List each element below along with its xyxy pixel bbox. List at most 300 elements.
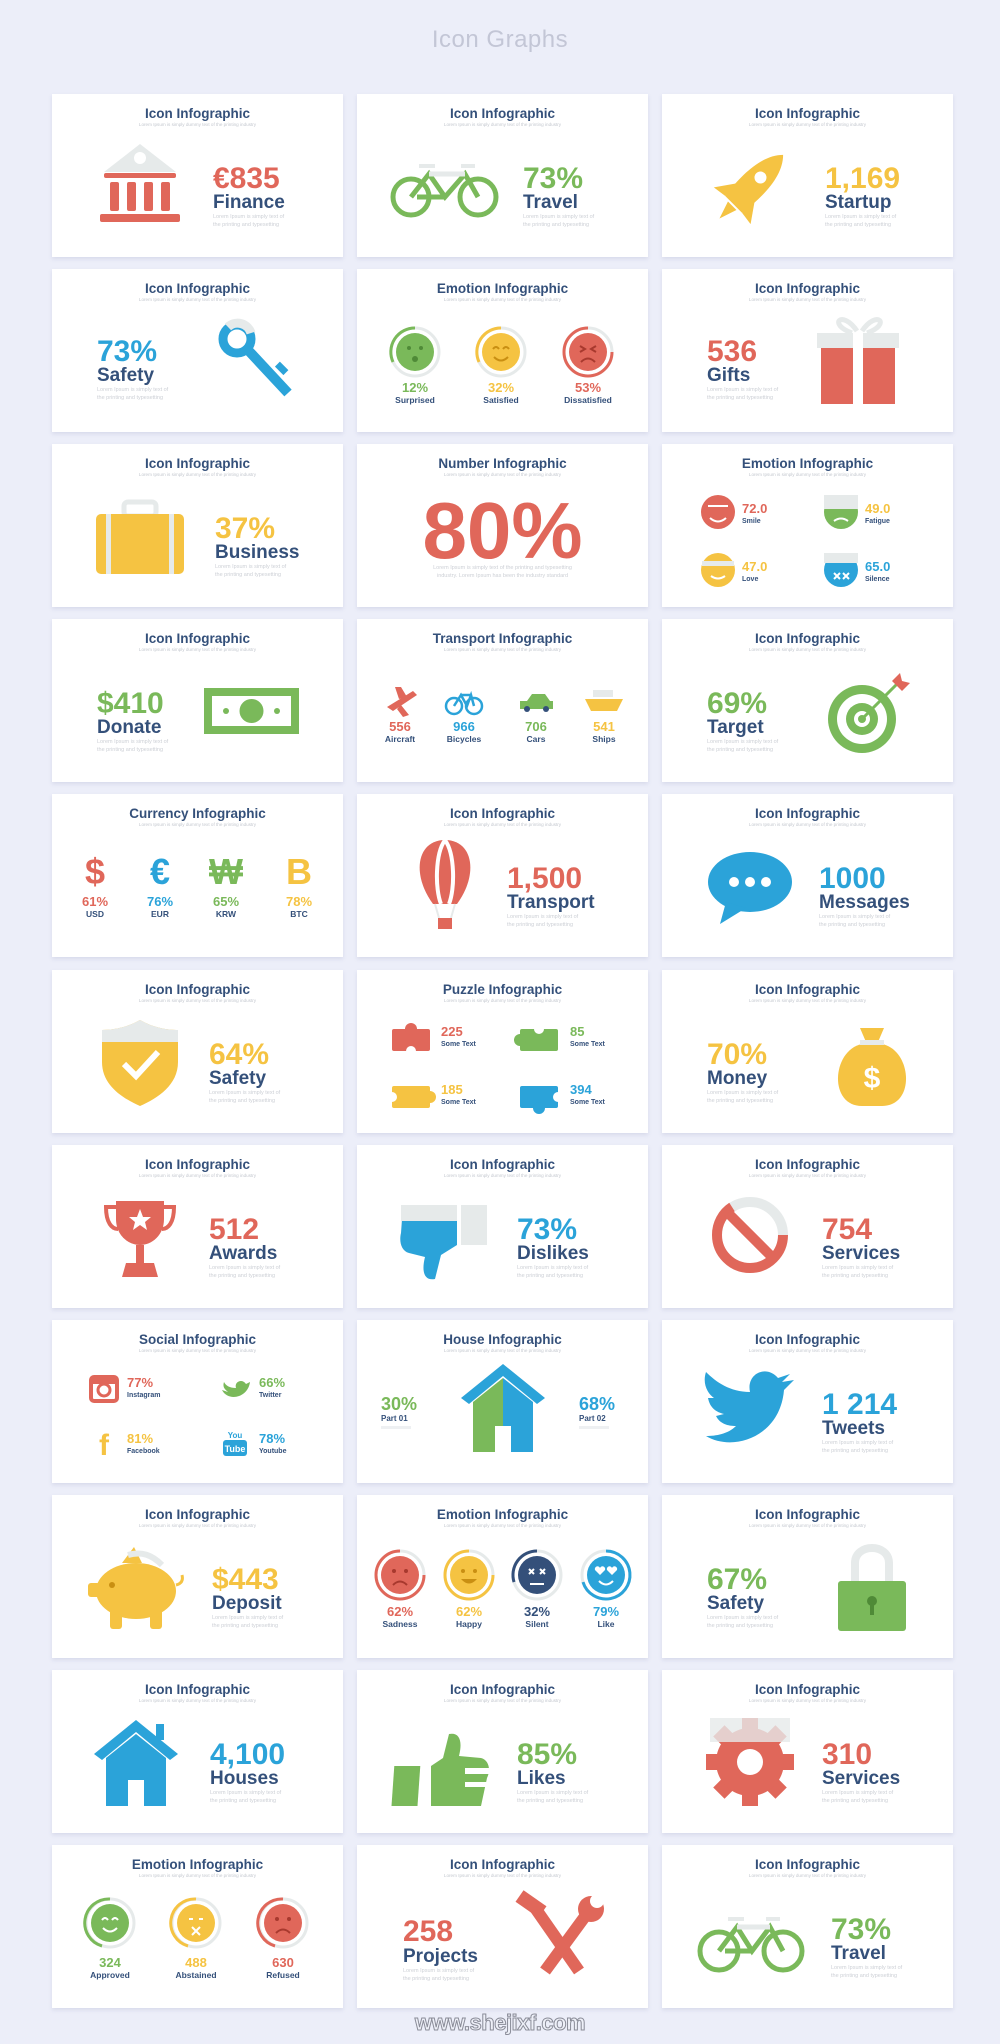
panel: money [662, 970, 953, 1133]
panel: lock safety: Lorem Ipsum is simply text of [707, 1615, 779, 1621]
panel: finance: Lorem Ipsum is simply text of [213, 214, 285, 220]
panel: messages: 1000 [819, 862, 886, 895]
panel: currency: Currency Infographic [129, 806, 266, 821]
face: approved [85, 1899, 134, 1980]
panel: donate: Lorem Ipsum is simply text of [97, 739, 169, 745]
face: dissatisfied: Dissatisfied [564, 395, 612, 405]
panel: donate: $410 [97, 687, 164, 720]
panel: projects: 258 [403, 1915, 453, 1948]
icon: speech bubble [708, 852, 792, 924]
panel: services gear: Lorem Ipsum is simply dummy text of the printing industry [749, 1698, 867, 1703]
panel: shield safety: Safety [209, 1068, 266, 1089]
face: surprised: Surprised [395, 395, 435, 405]
panel: projects: Icon Infographic [450, 1857, 555, 1872]
puzzle: 225 [392, 1023, 477, 1056]
panel: balloon transport [357, 794, 648, 957]
icon: no sign [717, 1202, 783, 1268]
panel: lock safety [662, 1495, 953, 1658]
panel: lock safety: the printing and typesetting [707, 1623, 773, 1629]
panel: number 80%: Lorem Ipsum is simply text of the printing and typesetting [433, 565, 572, 571]
panel: houses: the printing and typesetting [210, 1798, 276, 1804]
panel: likes: Likes [517, 1768, 566, 1789]
panel: services no sign: Icon Infographic [755, 1157, 860, 1172]
panel: awards: Lorem Ipsum is simply dummy text of the printing industry [139, 1173, 257, 1178]
panel: services no sign: the printing and typesetting [822, 1273, 888, 1279]
face: smile: 72.0 [742, 501, 767, 516]
panel: houses: Lorem Ipsum is simply text of [210, 1790, 282, 1796]
icon: bicycle [700, 1917, 802, 1970]
panel: emotion 3 [357, 269, 648, 432]
icon: usd: 61% [82, 894, 108, 909]
panel: safety key: 73% [97, 335, 157, 368]
panel: dislikes [357, 1145, 648, 1308]
face: surprised: 12% [402, 380, 428, 395]
icon: youtube [223, 1431, 287, 1456]
panel: social: Lorem Ipsum is simply dummy text of the printing industry [139, 1348, 257, 1353]
face: abstained: 488 [185, 1955, 207, 1970]
panel: messages: the printing and typesetting [819, 922, 885, 928]
panel: startup [662, 94, 953, 257]
icon: bicycle small: 966 [453, 719, 475, 734]
panel: travel: Travel [523, 192, 578, 213]
icon: twitter [222, 1375, 285, 1399]
panel: money: the printing and typesetting [707, 1098, 773, 1104]
icon: youtube: Youtube [259, 1448, 287, 1455]
panel: travel bike: 73% [831, 1913, 891, 1946]
icon: twitter: 66% [259, 1375, 285, 1390]
face: fatigue: Fatigue [865, 518, 890, 525]
panel: emotion 2x2 [662, 444, 953, 607]
panel: houses: Houses [210, 1768, 279, 1789]
panel: donate: Lorem Ipsum is simply dummy text of the printing industry [139, 647, 257, 652]
icon: eur [147, 851, 173, 919]
puzzle: 225: Some Text [441, 1041, 477, 1048]
face: dissatisfied [564, 328, 612, 405]
panel: services no sign: Lorem Ipsum is simply text of [822, 1265, 894, 1271]
panel: business: Business [215, 542, 299, 563]
panel: messages: Icon Infographic [755, 806, 860, 821]
icon: money bag: $ [864, 1062, 881, 1095]
panel: dislikes: Icon Infographic [450, 1157, 555, 1172]
panel: startup: Icon Infographic [755, 106, 860, 121]
panel: startup: the printing and typesetting [825, 222, 891, 228]
panel: projects: Lorem Ipsum is simply text of [403, 1968, 475, 1974]
face: sadness: 62% [387, 1604, 413, 1619]
panel: gifts: the printing and typesetting [707, 395, 773, 401]
panel: puzzle [357, 970, 648, 1133]
face: smile: Smile [742, 518, 761, 525]
panel: emotion approved [52, 1845, 343, 2008]
panel: house parts: 30% [381, 1394, 417, 1414]
panel: puzzle: Lorem Ipsum is simply dummy text of the printing industry [444, 998, 562, 1003]
panel: messages: Lorem Ipsum is simply dummy text of the printing industry [749, 822, 867, 827]
panel: travel: the printing and typesetting [523, 222, 589, 228]
panel: deposit: Deposit [212, 1593, 282, 1614]
icon: usd: USD [86, 909, 104, 919]
panel: dislikes: 73% [517, 1213, 577, 1246]
icon: youtube: You [228, 1431, 242, 1440]
panel: lock safety: Safety [707, 1593, 764, 1614]
panel: awards: 512 [209, 1213, 259, 1246]
icon: money [204, 688, 299, 734]
panel: awards: Icon Infographic [145, 1157, 250, 1172]
face: silent: 32% [524, 1604, 550, 1619]
panel: shield safety: Icon Infographic [145, 982, 250, 997]
panel: travel bike: Icon Infographic [755, 1857, 860, 1872]
panel: money: Icon Infographic [755, 982, 860, 997]
panel: target: Icon Infographic [755, 631, 860, 646]
icon: krw: 65% [213, 894, 239, 909]
panel: donate: Icon Infographic [145, 631, 250, 646]
panel: messages [662, 794, 953, 957]
panel: houses [52, 1670, 343, 1833]
icon: bicycle small: Bicycles [447, 734, 482, 744]
icon: krw: ₩ [209, 851, 243, 892]
puzzle: 225: 225 [441, 1024, 463, 1039]
icon: trophy [106, 1201, 174, 1277]
icon: house [461, 1364, 545, 1452]
panel: shield safety: 64% [209, 1038, 269, 1071]
panel: lock safety: Lorem Ipsum is simply dummy text of the printing industry [749, 1523, 867, 1528]
icon: facebook [99, 1429, 160, 1462]
panel: donate: Donate [97, 717, 161, 738]
panel: target [662, 619, 953, 782]
panel: messages: Messages [819, 892, 910, 913]
panel: business: 37% [215, 512, 275, 545]
panel: awards: Lorem Ipsum is simply text of [209, 1265, 281, 1271]
puzzle: 185 [387, 1082, 477, 1108]
panel: startup: Lorem Ipsum is simply dummy text of the printing industry [749, 122, 867, 127]
panel: emotion approved: Lorem Ipsum is simply dummy text of the printing industry [139, 1873, 257, 1878]
icon: rocket [701, 137, 801, 237]
icon: ship: Ships [592, 734, 616, 744]
panel: deposit: the printing and typesetting [212, 1623, 278, 1629]
panel: awards [52, 1145, 343, 1308]
panel: target: Lorem Ipsum is simply text of [707, 739, 779, 745]
panel: safety key: Icon Infographic [145, 281, 250, 296]
panel: currency: Lorem Ipsum is simply dummy text of the printing industry [139, 822, 257, 827]
icon: facebook: f [99, 1429, 110, 1462]
panel: emotion 4: Emotion Infographic [437, 1507, 569, 1522]
icon: aircraft [385, 687, 417, 744]
panel: deposit: Lorem Ipsum is simply dummy text of the printing industry [139, 1523, 257, 1528]
panel: travel bike [662, 1845, 953, 2008]
panel: deposit [52, 1495, 343, 1658]
icon: thumbs down [400, 1205, 487, 1279]
icon: facebook: 81% [127, 1431, 153, 1446]
icon: instagram: Instagram [127, 1392, 160, 1399]
panel: number 80%: Lorem Ipsum is simply dummy text of the printing industry [444, 472, 562, 477]
panel: gifts: Gifts [707, 365, 750, 386]
panel: travel bike: Travel [831, 1943, 886, 1964]
icon: ship [585, 690, 623, 744]
panel: finance: €835 [213, 162, 280, 195]
panel: tweets: Tweets [822, 1418, 885, 1439]
panel: dislikes: Dislikes [517, 1243, 589, 1264]
panel: puzzle: Puzzle Infographic [443, 982, 563, 997]
panel: money: Money [707, 1068, 768, 1089]
icon: youtube: Tube [225, 1444, 245, 1454]
panel: money: Lorem Ipsum is simply dummy text of the printing industry [749, 998, 867, 1003]
panel: emotion 3: Lorem Ipsum is simply dummy text of the printing industry [444, 297, 562, 302]
face: silent [513, 1551, 561, 1629]
panel: travel bike: Lorem Ipsum is simply text of [831, 1965, 903, 1971]
panel: social [52, 1320, 343, 1483]
panel: deposit: $443 [212, 1563, 279, 1596]
panel: number 80% [357, 444, 648, 607]
icon: twitter bird [705, 1371, 794, 1442]
panel: likes: the printing and typesetting [517, 1798, 583, 1804]
puzzle: 185: 185 [441, 1082, 463, 1097]
panel: services gear [662, 1670, 953, 1833]
panel: services gear: 310 [822, 1738, 872, 1771]
puzzle: 394: 394 [570, 1082, 592, 1097]
icon: bank [100, 144, 180, 222]
face: fatigue [824, 495, 890, 529]
panel: travel: Icon Infographic [450, 106, 555, 121]
icon: gear [706, 1718, 794, 1806]
panel: tweets: the printing and typesetting [822, 1448, 888, 1454]
panel: houses: 4,100 [210, 1738, 285, 1771]
icon: bicycle small [446, 695, 482, 744]
panel: money: 70% [707, 1038, 767, 1071]
puzzle: 394: Some Text [570, 1099, 606, 1106]
panel: balloon transport: Transport [507, 892, 595, 913]
panel: gifts: Icon Infographic [755, 281, 860, 296]
panel: business: Icon Infographic [145, 456, 250, 471]
face: love [701, 553, 767, 587]
icon: btc: BTC [290, 909, 308, 919]
face: satisfied: Satisfied [483, 395, 519, 405]
icon: usd: $ [85, 851, 105, 892]
panel: dislikes: the printing and typesetting [517, 1273, 583, 1279]
panel: finance: Icon Infographic [145, 106, 250, 121]
panel: emotion 3: Emotion Infographic [437, 281, 569, 296]
face: love: Love [742, 576, 758, 583]
panel: tweets: Icon Infographic [755, 1332, 860, 1347]
panel: deposit: Icon Infographic [145, 1507, 250, 1522]
panel: emotion 2x2: Lorem Ipsum is simply dummy text of the printing industry [749, 472, 867, 477]
face: approved: Approved [90, 1970, 130, 1980]
panel: dislikes: Lorem Ipsum is simply dummy text of the printing industry [444, 1173, 562, 1178]
face: happy: 62% [456, 1604, 482, 1619]
panel: travel [357, 94, 648, 257]
panel: lock safety: 67% [707, 1563, 767, 1596]
panel: lock safety: Icon Infographic [755, 1507, 860, 1522]
panel: shield safety: Lorem Ipsum is simply dummy text of the printing industry [139, 998, 257, 1003]
panel: messages: Lorem Ipsum is simply text of [819, 914, 891, 920]
panel: donate [52, 619, 343, 782]
puzzle: 185: Some Text [441, 1099, 477, 1106]
face: fatigue: 49.0 [865, 501, 890, 516]
panel: transport [357, 619, 648, 782]
icon: shield [102, 1020, 178, 1106]
puzzle: 85: Some Text [570, 1041, 606, 1048]
panel: travel: Lorem Ipsum is simply dummy text of the printing industry [444, 122, 562, 127]
panel: transport: Transport Infographic [433, 631, 573, 646]
panel: dislikes: Lorem Ipsum is simply text of [517, 1265, 589, 1271]
panel: target: 69% [707, 687, 767, 720]
puzzle: 85 [514, 1024, 606, 1051]
panel: houses: Lorem Ipsum is simply dummy text of the printing industry [139, 1698, 257, 1703]
panel: target: Target [707, 717, 764, 738]
panel: transport: Lorem Ipsum is simply dummy text of the printing industry [444, 647, 562, 652]
panel: balloon transport: Lorem Ipsum is simply dummy text of the printing industry [444, 822, 562, 827]
panel: emotion 2x2: Emotion Infographic [742, 456, 874, 471]
icon: lock [838, 1548, 906, 1631]
icon: btc: B [286, 851, 312, 892]
panel: safety key: Lorem Ipsum is simply dummy text of the printing industry [139, 297, 257, 302]
panel: tweets: 1 214 [822, 1388, 897, 1421]
face: silent: Silent [525, 1619, 549, 1629]
panel: projects: the printing and typesetting [403, 1976, 469, 1982]
panel: likes [357, 1670, 648, 1833]
panel: business [52, 444, 343, 607]
face: surprised [391, 328, 439, 405]
panel: balloon transport: 1,500 [507, 862, 582, 895]
panel: services no sign: Services [822, 1243, 900, 1264]
face: satisfied [477, 328, 525, 405]
icon: tools [516, 1890, 604, 1971]
panel: target: Lorem Ipsum is simply dummy text of the printing industry [749, 647, 867, 652]
icon: piggy bank [88, 1547, 182, 1629]
panel: houses: Icon Infographic [145, 1682, 250, 1697]
panel: likes: Lorem Ipsum is simply dummy text of the printing industry [444, 1698, 562, 1703]
face: abstained: Abstained [175, 1970, 217, 1980]
icon: house blue [94, 1720, 178, 1806]
face: refused [258, 1899, 307, 1980]
icon: key [223, 323, 288, 393]
panel: emotion approved: Emotion Infographic [132, 1857, 264, 1872]
icon: briefcase [96, 502, 184, 574]
icon: thumbs up [391, 1734, 489, 1806]
panel: gifts [662, 269, 953, 432]
face: like: 79% [593, 1604, 619, 1619]
face: sadness: Sadness [383, 1619, 418, 1629]
panel: startup: Lorem Ipsum is simply text of [825, 214, 897, 220]
icon: eur: 76% [147, 894, 173, 909]
panel: deposit: Lorem Ipsum is simply text of [212, 1615, 284, 1621]
panel: services gear: Icon Infographic [755, 1682, 860, 1697]
panel: services no sign: Lorem Ipsum is simply dummy text of the printing industry [749, 1173, 867, 1178]
icon: eur: € [150, 851, 170, 892]
face: dissatisfied: 53% [575, 380, 601, 395]
icon: gift [817, 320, 899, 404]
panel: social: Social Infographic [139, 1332, 256, 1347]
icon: btc: 78% [286, 894, 312, 909]
panel: services gear: Services [822, 1768, 900, 1789]
panel: projects: Lorem Ipsum is simply dummy text of the printing industry [444, 1873, 562, 1878]
icon: youtube: 78% [259, 1431, 285, 1446]
icon: instagram: 77% [127, 1375, 153, 1390]
panel: business: the printing and typesetting [215, 572, 281, 578]
puzzle: 394 [520, 1082, 606, 1114]
panel: shield safety [52, 970, 343, 1133]
panel: target: the printing and typesetting [707, 747, 773, 753]
panel: shield safety: the printing and typesetting [209, 1098, 275, 1104]
panel: emotion 4 [357, 1495, 648, 1658]
panel: house parts: 68% [579, 1394, 615, 1414]
panel: business: Lorem Ipsum is simply text of [215, 564, 287, 570]
panel: services gear: Lorem Ipsum is simply text of [822, 1790, 894, 1796]
panel: tweets: Lorem Ipsum is simply text of [822, 1440, 894, 1446]
title: Icon Graphs [432, 26, 568, 53]
icon: balloon [420, 840, 470, 929]
icon: eur: EUR [151, 909, 169, 919]
panel: finance [52, 94, 343, 257]
face: refused: Refused [266, 1970, 300, 1980]
puzzle: 85: 85 [570, 1024, 584, 1039]
panel: projects [357, 1845, 648, 2008]
watermark: www.shejixf.com [415, 2010, 585, 2035]
panel: travel: Lorem Ipsum is simply text of [523, 214, 595, 220]
panel: services no sign: 754 [822, 1213, 872, 1246]
icon: car [520, 694, 553, 744]
face: love: 47.0 [742, 559, 767, 574]
panel: number 80%: industry. Lorem Ipsum has been the industry standard [437, 573, 568, 579]
face: satisfied: 32% [488, 380, 514, 395]
panel: house parts: House Infographic [443, 1332, 562, 1347]
panel: likes: Lorem Ipsum is simply text of [517, 1790, 589, 1796]
panel: likes: Icon Infographic [450, 1682, 555, 1697]
face: like [582, 1551, 630, 1629]
icon: car: 706 [525, 719, 547, 734]
panel: projects: Projects [403, 1946, 478, 1967]
icon: ship: 541 [593, 719, 615, 734]
icon: facebook: Facebook [127, 1448, 160, 1455]
panel: awards: the printing and typesetting [209, 1273, 275, 1279]
panel: gifts: 536 [707, 335, 757, 368]
panel: balloon transport: Icon Infographic [450, 806, 555, 821]
icon: krw: KRW [216, 909, 237, 919]
panel: house parts: Part 01 [381, 1414, 408, 1423]
icon: aircraft: 556 [389, 719, 411, 734]
icon: twitter: Twitter [259, 1392, 282, 1399]
face: refused: 630 [272, 1955, 294, 1970]
panel: services no sign [662, 1145, 953, 1308]
panel: finance: Finance [213, 192, 285, 213]
icon: krw [209, 851, 243, 919]
panel: currency [52, 794, 343, 957]
icon: car: Cars [527, 734, 546, 744]
icon: usd [82, 851, 108, 919]
panel: emotion 4: Lorem Ipsum is simply dummy text of the printing industry [444, 1523, 562, 1528]
panel: balloon transport: Lorem Ipsum is simply text of [507, 914, 579, 920]
face: silence: Silence [865, 576, 890, 583]
panel: house parts: Part 02 [579, 1414, 606, 1423]
panel: gifts: Lorem Ipsum is simply text of [707, 387, 779, 393]
panel: startup: Startup [825, 192, 892, 213]
panel: tweets: Lorem Ipsum is simply dummy text of the printing industry [749, 1348, 867, 1353]
face: silence [824, 553, 890, 587]
panel: finance: Lorem Ipsum is simply dummy text of the printing industry [139, 122, 257, 127]
panel: number 80%: 80% [422, 486, 583, 575]
panel: travel: 73% [523, 162, 583, 195]
panel: startup: 1,169 [825, 162, 900, 195]
panel: likes: 85% [517, 1738, 577, 1771]
icon: aircraft: Aircraft [385, 734, 415, 744]
panel: house parts [357, 1320, 648, 1483]
panel: travel bike: Lorem Ipsum is simply dummy text of the printing industry [749, 1873, 867, 1878]
face: sadness [376, 1551, 424, 1629]
face: happy [445, 1551, 493, 1629]
panel: money: Lorem Ipsum is simply text of [707, 1090, 779, 1096]
panel: finance: the printing and typesetting [213, 222, 279, 228]
panel: number 80%: Number Infographic [438, 456, 567, 471]
panel: travel bike: the printing and typesetting [831, 1973, 897, 1979]
panel: safety key: the printing and typesetting [97, 395, 163, 401]
panel: house parts: Lorem Ipsum is simply dummy text of the printing industry [444, 1348, 562, 1353]
